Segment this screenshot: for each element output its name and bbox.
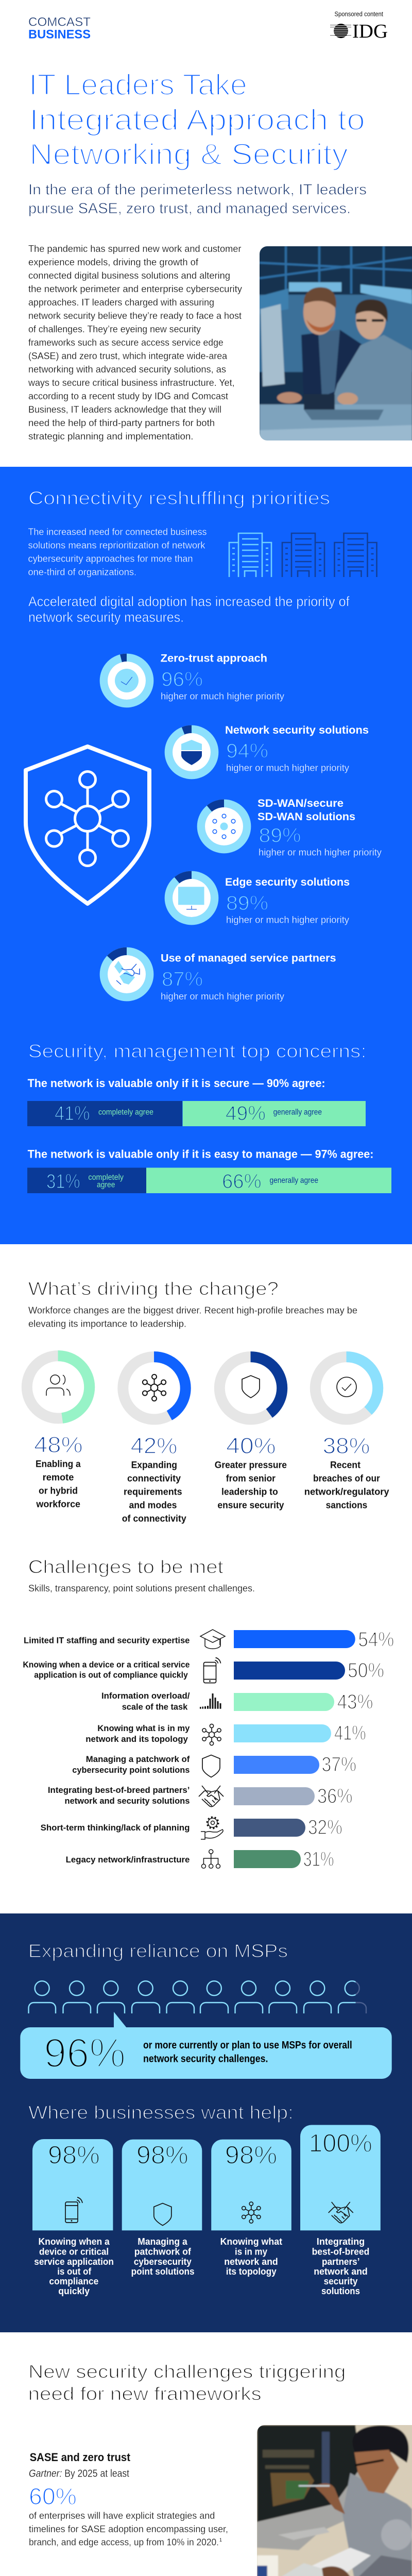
stat: managed service partners 87%: higher or much higher priority — [161, 991, 284, 1002]
chart: network valuable if easy to manage: The network is valuable only if it is easy to manage — 97% agree: — [28, 1148, 374, 1160]
title: Networking & Security — [29, 138, 348, 171]
callout: 96% use MSPs: or more currently or plan to use MSPs for overall — [143, 2040, 352, 2051]
callout: 96% use MSPs: network security challenges. — [143, 2053, 268, 2064]
bar: device compliance 50%: application is out of compliance quickly — [34, 1671, 188, 1680]
card: topology 98% — [211, 2140, 291, 2277]
chart: driver 42% connectivity: and modes — [129, 1500, 177, 1511]
intro paragraph: of challenges. They’re eyeing new security — [28, 324, 201, 334]
bar: integrating partners 36%: Integrating best-of-breed partners’ — [48, 1786, 190, 1795]
heading: new security challenges: need for new frameworks — [28, 2383, 262, 2404]
text block: SASE and zero trust: 60% — [29, 2483, 77, 2510]
bar: device compliance 50% — [23, 1658, 384, 1683]
chart: network valuable if secure: 49% — [226, 1103, 266, 1125]
card: compliance 98% — [32, 2139, 114, 2296]
photo: developer pointing at code on monitor — [255, 2423, 412, 2576]
bar: patchwork 37%: Managing a patchwork of — [86, 1755, 190, 1764]
logo: Comcast Business — [28, 15, 91, 41]
callout: 96% use MSPs — [20, 2012, 392, 2079]
chart: driver 40% senior leadership: 40% — [226, 1434, 276, 1459]
heading: expanding reliance on MSPs: Expanding reliance on MSPs — [28, 1940, 288, 1961]
bar: device compliance 50%: Knowing when a device or a critical service — [23, 1660, 190, 1669]
chart: driver 42% connectivity: connectivity — [127, 1473, 181, 1484]
text block: reprioritization — [28, 527, 207, 577]
bar: limited staffing 54% — [24, 1628, 394, 1651]
card: patchwork 98%: point solutions — [131, 2266, 195, 2277]
card: best-of-breed 100%: 100% — [309, 2130, 372, 2158]
intro paragraph: ways to secure critical business infrastructure. Yet, — [28, 378, 235, 388]
heading: new security challenges — [28, 2361, 346, 2404]
card: best-of-breed 100%: solutions — [321, 2285, 360, 2296]
intro paragraph: strategic planning and implementation. — [28, 431, 194, 442]
bar: limited staffing 54%: Limited IT staffing and security expertise — [24, 1636, 190, 1645]
stat: SD-WAN solutions 89%: SD-WAN solutions — [258, 811, 355, 823]
stat: edge security solutions 89%: higher or much higher priority — [226, 915, 349, 925]
intro paragraph: according to a recent study by IDG and Comcast — [28, 391, 228, 401]
card: compliance 98%: Knowing when a — [38, 2236, 110, 2247]
chart: driver 40% senior leadership: from senior — [226, 1473, 276, 1484]
text block: SASE and zero trust: timelines for SASE adoption encompassing user, — [29, 2523, 228, 2534]
stat: managed service partners 87%: 87% — [162, 968, 203, 990]
heading: what's driving the change: What’s driving the change? — [28, 1278, 279, 1299]
heading: challenges to be met: Challenges to be met — [28, 1556, 224, 1577]
callout: 96% use MSPs: 96% — [44, 2030, 126, 2076]
heading: security, management top concerns: Security, management top concerns: — [28, 1041, 367, 1062]
card: best-of-breed 100%: Integrating — [317, 2236, 365, 2247]
text block: SASE and zero trust: 1 — [219, 2537, 222, 2543]
text block: SASE and zero trust: Gartner: By 2025 at least — [29, 2468, 129, 2479]
stat: network security solutions 94%: 94% — [226, 740, 268, 762]
card: compliance 98%: compliance — [49, 2276, 98, 2286]
intro paragraph: need the help of third-party partners for both — [28, 418, 215, 428]
card: topology 98%: its topology — [226, 2266, 277, 2277]
card: best-of-breed 100% — [300, 2125, 381, 2296]
card: best-of-breed 100%: security — [324, 2276, 358, 2286]
intro paragraph: network security believe they’re ready to face a host — [28, 311, 242, 321]
stat: SD-WAN solutions 89% — [201, 798, 382, 858]
card: compliance 98%: device or critical — [39, 2246, 109, 2257]
chart: network valuable if easy to manage: generally agree — [270, 1176, 318, 1185]
text block: SASE and zero trust — [29, 2451, 228, 2548]
chart: driver 40% senior leadership: Greater pressure — [215, 1460, 287, 1470]
intro paragraph: experience models, driving the growth of — [28, 257, 199, 267]
bar: network topology 41%: Knowing what is in my — [97, 1724, 190, 1733]
chart: driver 42% connectivity: Expanding — [131, 1460, 177, 1470]
chart: driver 38% breaches — [304, 1357, 389, 1511]
icon row: ten people, 96% highlighted — [29, 1981, 366, 2013]
stat: zero-trust approach 96%: higher or much higher priority — [161, 691, 284, 701]
bar: legacy infrastructure 31%: Legacy network/infrastructure — [66, 1855, 190, 1865]
bar: information overload 43% — [101, 1691, 373, 1714]
stat: edge security solutions 89%: 89% — [226, 892, 268, 914]
bar: network topology 41%: 41% — [334, 1722, 366, 1744]
bar: patchwork 37%: cybersecurity point solutions — [72, 1766, 190, 1775]
title: IT Leaders Take — [29, 69, 247, 101]
intro paragraph: Business, IT leaders acknowledge that they will — [28, 404, 221, 415]
chart: driver 48% remote workforce: remote — [43, 1472, 74, 1483]
card: compliance 98%: service application — [34, 2256, 114, 2267]
text block: reprioritization: solutions means reprioritization of network — [28, 540, 206, 550]
chart: driver 38% breaches: breaches of our — [313, 1473, 380, 1484]
text block: accelerated digital adoption — [28, 594, 350, 625]
card: topology 98%: 98% — [225, 2142, 277, 2170]
text block: reprioritization: The increased need for connected business — [28, 527, 207, 537]
chart: network valuable if secure: The network is valuable only if it is secure — 90% agree: — [28, 1077, 325, 1090]
text block: accelerated digital adoption: network security measures. — [28, 609, 184, 625]
chart: network valuable if secure — [27, 1077, 366, 1126]
text block: drivers intro: Workforce changes are the biggest driver. Recent high-profile breaches may be — [28, 1306, 357, 1316]
logo: sponsored content IDG — [330, 11, 388, 42]
card: patchwork 98%: 98% — [136, 2142, 188, 2170]
chart: driver 48% remote workforce: workforce — [36, 1499, 80, 1510]
bar: device compliance 50%: 50% — [348, 1659, 384, 1682]
intro paragraph: The pandemic has spurred new work and customer — [28, 244, 241, 254]
bar: patchwork 37% — [72, 1753, 356, 1777]
bar: information overload 43%: scale of the task — [122, 1702, 188, 1711]
stat: managed service partners 87% — [104, 951, 336, 1002]
intro paragraph: (SASE) and zero trust, which integrate wide-area — [28, 351, 228, 361]
chart: driver 40% senior leadership — [215, 1357, 287, 1511]
chart: network valuable if easy to manage: agree — [97, 1181, 115, 1189]
chart: network valuable if easy to manage: 66% — [222, 1171, 262, 1193]
text block: SASE and zero trust: SASE and zero trust — [30, 2451, 131, 2464]
icon row: one of three buildings highlighted — [229, 533, 377, 577]
card: patchwork 98%: cybersecurity — [134, 2256, 192, 2267]
chart: driver 42% connectivity: 42% — [131, 1434, 177, 1459]
card: topology 98%: is in my — [235, 2246, 268, 2257]
stat: SD-WAN solutions 89%: 89% — [259, 825, 301, 847]
stat: zero-trust approach 96%: 96% — [161, 669, 203, 691]
subtitle: In the era of the perimeterless network, IT leaders — [28, 182, 367, 198]
chart: network valuable if secure: completely agree — [98, 1108, 153, 1117]
bar: network topology 41% — [85, 1722, 366, 1745]
text block: accelerated digital adoption: Accelerated digital adoption has increased the priority of — [28, 594, 350, 609]
chart: network valuable if secure: generally agree — [273, 1108, 322, 1117]
chart: network valuable if easy to manage: completely — [88, 1173, 124, 1182]
card: patchwork 98% — [122, 2140, 202, 2277]
card: best-of-breed 100%: partners’ — [322, 2256, 359, 2267]
card: patchwork 98%: patchwork of — [134, 2246, 192, 2257]
bar: patchwork 37%: 37% — [321, 1753, 356, 1776]
subtitle — [28, 182, 367, 217]
bar: information overload 43%: 43% — [337, 1691, 373, 1714]
chart: driver 38% breaches: 38% — [322, 1434, 370, 1459]
bar: integrating partners 36% — [48, 1785, 353, 1807]
bar: integrating partners 36%: network and security solutions — [65, 1797, 190, 1806]
panel: connectivity section — [0, 467, 412, 1244]
chart: driver 48% remote workforce: Enabling a — [36, 1459, 81, 1469]
stat: edge security solutions 89%: Edge security solutions — [225, 876, 350, 888]
chart: network valuable if secure: 41% — [55, 1103, 90, 1125]
photo: two IT workers at a monitor — [258, 244, 412, 443]
chart: network valuable if easy to manage — [27, 1148, 391, 1193]
intro paragraph: approaches. IT leaders charged with assuring — [28, 297, 214, 308]
card: compliance 98%: quickly — [58, 2285, 90, 2296]
icon: large network shield — [26, 747, 149, 904]
intro paragraph — [28, 244, 242, 442]
text block: drivers intro: elevating its importance to leadership. — [28, 1319, 186, 1329]
bar: legacy infrastructure 31% — [66, 1848, 334, 1871]
heading: where businesses want help: Where businesses want help: — [28, 2102, 294, 2123]
chart: driver 38% breaches: Recent — [330, 1460, 360, 1470]
chart: driver 42% connectivity: of connectivity — [122, 1514, 186, 1524]
title: Integrated Approach to — [29, 104, 365, 137]
card: topology 98%: network and — [224, 2256, 278, 2267]
logo: sponsored content IDG: IDG — [352, 21, 388, 42]
bar: short-term thinking 32%: 32% — [308, 1816, 342, 1839]
stat: network security solutions 94% — [168, 724, 369, 775]
bar: limited staffing 54%: 54% — [358, 1628, 394, 1651]
stat: zero-trust approach 96% — [104, 653, 284, 704]
logo: Comcast Business: BUSINESS — [28, 27, 91, 41]
card: topology 98%: Knowing what — [220, 2236, 282, 2247]
text block: reprioritization: one-third of organizations. — [28, 567, 136, 577]
stat: edge security solutions 89% — [168, 875, 350, 925]
stat: SD-WAN solutions 89%: SD-WAN/secure — [258, 798, 344, 809]
card: patchwork 98%: Managing a — [138, 2236, 187, 2247]
chart: driver 38% breaches: sanctions — [326, 1500, 367, 1511]
chart: driver 48% remote workforce: or hybrid — [39, 1486, 78, 1496]
title — [29, 69, 365, 171]
intro paragraph: connected digital business solutions and altering — [28, 270, 230, 281]
chart: network valuable if easy to manage: 31% — [46, 1171, 80, 1193]
bar: short-term thinking 32% — [41, 1816, 342, 1839]
heading: connectivity reshuffling priorities: Connectivity reshuffling priorities — [28, 487, 330, 509]
card: best-of-breed 100%: network and — [314, 2266, 368, 2277]
text block: reprioritization: cybersecurity approaches for more than — [28, 553, 193, 564]
chart: challenges horizontal bars — [23, 1628, 394, 1871]
bar: information overload 43%: Information overload/ — [101, 1691, 190, 1701]
card: compliance 98%: is out of — [57, 2266, 92, 2277]
text block: drivers intro — [28, 1306, 357, 1329]
subtitle: pursue SASE, zero trust, and managed services. — [28, 200, 351, 217]
logo: Comcast Business: COMCAST — [28, 15, 91, 29]
bar: legacy infrastructure 31%: 31% — [303, 1848, 334, 1871]
chart: driver 48% remote workforce — [27, 1356, 90, 1510]
stat: SD-WAN solutions 89%: higher or much higher priority — [259, 848, 382, 858]
bar: network topology 41%: network and its topology — [85, 1735, 188, 1744]
logo: sponsored content IDG: Sponsored content — [335, 11, 383, 18]
chart: driver 40% senior leadership: ensure security — [217, 1500, 284, 1511]
stat: zero-trust approach 96%: Zero-trust approach — [161, 653, 267, 665]
chart: driver 48% remote workforce: 48% — [34, 1433, 83, 1458]
panel: MSP section — [0, 1913, 412, 2332]
chart: driver 40% senior leadership: leadership to — [221, 1487, 278, 1497]
text block: challenges intro: Skills, transparency, point solutions present challenges. — [28, 1583, 255, 1594]
card: best-of-breed 100%: best-of-breed — [312, 2246, 369, 2257]
chart: driver 42% connectivity: requirements — [124, 1487, 182, 1497]
bar: integrating partners 36%: 36% — [317, 1785, 353, 1807]
card: compliance 98%: 98% — [48, 2142, 100, 2170]
stat: managed service partners 87%: Use of managed service partners — [161, 953, 336, 964]
intro paragraph: frameworks such as secure access service edge — [28, 337, 224, 348]
stat: network security solutions 94%: Network security solutions — [225, 724, 369, 736]
stat: network security solutions 94%: higher or much higher priority — [226, 763, 349, 773]
bar: short-term thinking 32%: Short-term thinking/lack of planning — [41, 1823, 190, 1833]
chart: driver 42% connectivity — [122, 1357, 186, 1524]
text block: SASE and zero trust: branch, and edge access, up from 10% in 2020. — [29, 2537, 219, 2548]
text block: SASE and zero trust: of enterprises will have explicit strategies and — [29, 2510, 215, 2521]
intro paragraph: networking with advanced security solutions, as — [28, 364, 226, 375]
chart: driver 38% breaches: network/regulatory — [304, 1487, 389, 1497]
heading: new security challenges: New security challenges triggering — [28, 2361, 346, 2382]
intro paragraph: the network perimeter and enterprise cybersecurity — [28, 284, 242, 294]
